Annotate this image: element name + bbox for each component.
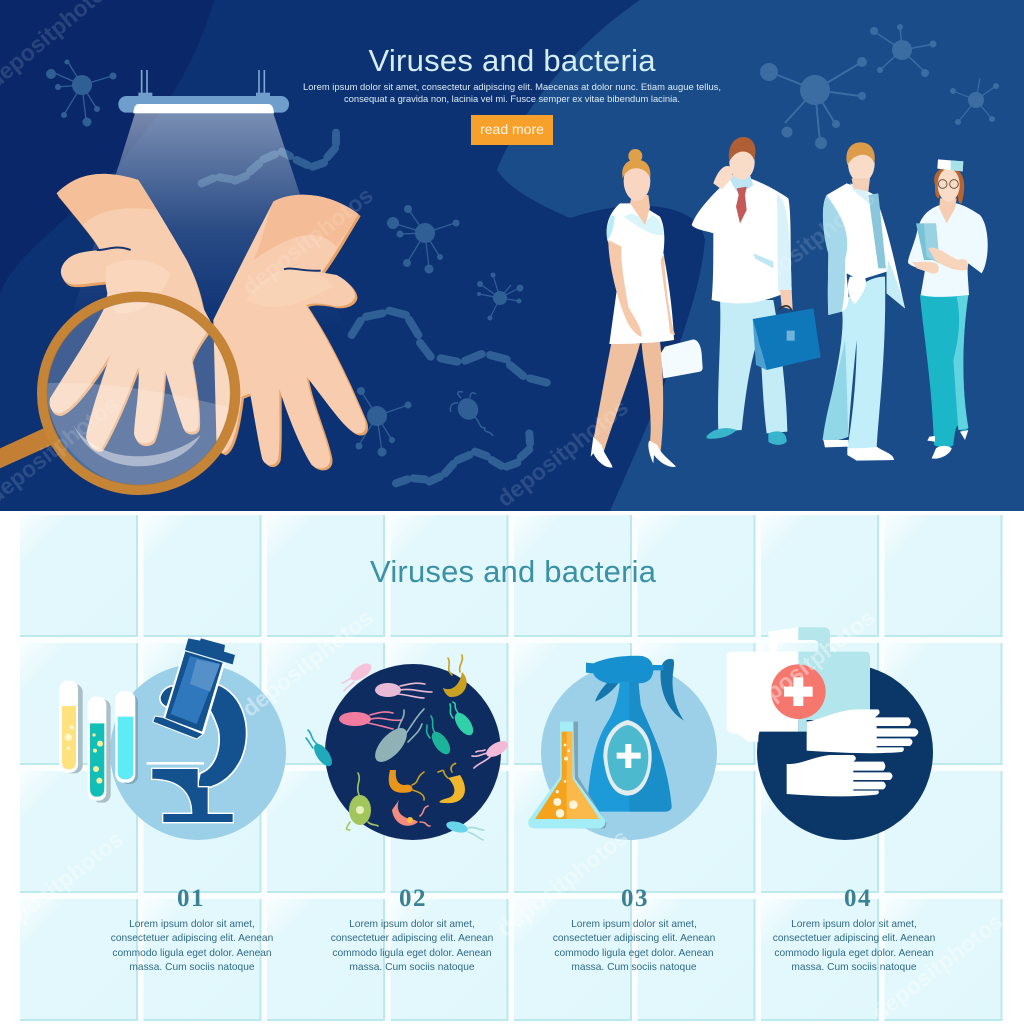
bacterium grey-green — [370, 709, 424, 767]
icon: molecule lower centre — [356, 387, 412, 456]
watermarks on tiles: depositphotos — [867, 908, 1008, 1024]
lamp — [118, 70, 289, 113]
banner text block: consequat a gravida non, lacinia vel mi. Fusce semper ex vitae bibendum lacinia. — [344, 93, 680, 104]
icon: molecule far right — [950, 78, 999, 125]
icon: microscope and test tubes — [59, 638, 286, 840]
text 02: massa. Cum sociis natoque — [349, 962, 475, 973]
watermarks on tiles: depositphotos — [739, 604, 880, 722]
watermarks: depositphotos — [237, 182, 378, 300]
text 02: Lorem ipsum dolor sit amet, — [349, 919, 475, 930]
watermarks on tiles: depositphotos — [492, 824, 633, 942]
icon: molecule upper right — [870, 24, 936, 77]
text 03: commodo ligula eget dolor. Aenean — [554, 948, 714, 959]
step 01 — [111, 885, 273, 973]
icon: molecule top left — [46, 60, 116, 126]
bacteria chain middle — [352, 311, 547, 383]
lower panel tiled wall — [0, 511, 1024, 1024]
flask — [528, 722, 607, 828]
bacterium pink top — [375, 683, 432, 698]
dark circle — [757, 664, 933, 840]
bacterium orange — [389, 770, 424, 800]
step 02 — [331, 885, 493, 973]
right hand — [213, 195, 368, 470]
bacterium cyan left — [306, 730, 335, 769]
bacterium rose — [339, 712, 402, 729]
text 01: commodo ligula eget dolor. Aenean — [112, 948, 272, 959]
text 01: Lorem ipsum dolor sit amet, — [129, 919, 255, 930]
text 01: consectetuer adipiscing elit. Aenean — [111, 933, 273, 944]
icon: molecule centre — [387, 205, 460, 274]
watermarks: depositphotos — [739, 184, 880, 302]
icon: bacterium bug — [450, 392, 493, 436]
bacteria chain upper — [202, 133, 336, 183]
bacterium coral — [392, 800, 430, 826]
bacterium pink top left — [342, 660, 374, 691]
step 03 — [553, 885, 715, 973]
nurse with bag — [591, 149, 703, 467]
test tubes — [59, 681, 138, 803]
icon: molecule top right large — [760, 57, 867, 149]
dark circle — [325, 664, 501, 840]
spray bottle — [586, 656, 684, 812]
top banner — [0, 0, 1024, 511]
text 04: Lorem ipsum dolor sit amet, — [791, 919, 917, 930]
number 01: 01 — [177, 885, 205, 912]
text 02: consectetuer adipiscing elit. Aenean — [331, 933, 493, 944]
read more button — [471, 115, 553, 145]
icon: molecule small centre — [477, 272, 524, 320]
bacterium light blue — [445, 819, 484, 840]
text 04: consectetuer adipiscing elit. Aenean — [773, 933, 935, 944]
icon: disinfectant spray and flask — [528, 656, 717, 840]
bacterium pink right — [472, 738, 510, 768]
light blue circle — [541, 664, 717, 840]
left hand — [50, 174, 215, 452]
glove lower — [787, 755, 892, 796]
light beam — [68, 113, 343, 327]
banner text block: Lorem ipsum dolor sit amet, consectetur adipiscing elit. Maecenas at dolor nunc. Etiam augue tellus, — [303, 81, 721, 92]
number 02: 02 — [399, 885, 427, 912]
first aid kit — [727, 627, 870, 742]
illustration: lamp and hands with magnifying glass — [0, 70, 368, 490]
text 01: massa. Cum sociis natoque — [129, 962, 255, 973]
bacterium yellow — [438, 763, 465, 803]
microscope — [147, 638, 247, 823]
text 03: massa. Cum sociis natoque — [571, 962, 697, 973]
icon: bacteria circle — [306, 655, 510, 840]
watermarks on tiles: depositphotos — [237, 604, 378, 722]
bacteria chain lower — [396, 433, 530, 483]
title banner: Viruses and bacteria — [368, 43, 656, 78]
nurse with clipboard — [908, 159, 988, 459]
watermarks: depositphotos — [492, 394, 633, 512]
bacterium gold top right — [443, 655, 467, 697]
step 04 — [773, 885, 935, 973]
watermarks on tiles — [0, 604, 1008, 1024]
text 04: massa. Cum sociis natoque — [791, 962, 917, 973]
bacterium lime — [347, 773, 378, 830]
text 03: consectetuer adipiscing elit. Aenean — [553, 933, 715, 944]
section heading: Viruses and bacteria — [370, 554, 657, 589]
bacterium teal — [427, 716, 454, 757]
doctor in open coat — [823, 142, 905, 461]
text 04: commodo ligula eget dolor. Aenean — [774, 948, 934, 959]
text 02: commodo ligula eget dolor. Aenean — [332, 948, 492, 959]
light blue circle — [110, 664, 286, 840]
illustration: medical staff — [591, 137, 988, 467]
read more button: read more — [480, 121, 544, 137]
watermarks — [0, 0, 880, 512]
bacterium mint — [450, 702, 477, 738]
icon: first aid kit and gloves — [727, 627, 933, 840]
text 03: Lorem ipsum dolor sit amet, — [571, 919, 697, 930]
number 03: 03 — [621, 885, 649, 912]
doctor with phone and briefcase — [692, 137, 821, 445]
number 04: 04 — [844, 885, 872, 912]
glove upper — [807, 709, 918, 753]
magnifying glass — [0, 297, 235, 490]
